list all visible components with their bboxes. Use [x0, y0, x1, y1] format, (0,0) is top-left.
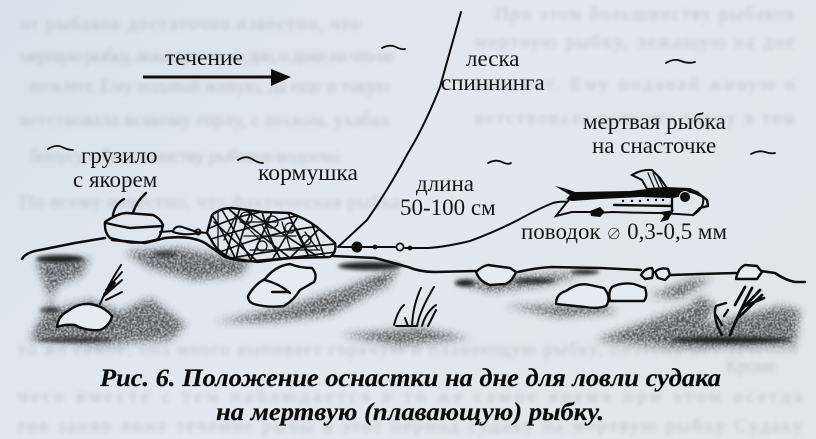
show-through text from the reverse page: бонусу и большинству рыбаков водоема: [30, 146, 341, 167]
rock: large pair: [556, 283, 646, 308]
label: feeder: кормушка: [258, 160, 358, 185]
swivel links: [160, 227, 207, 234]
water squiggles: [48, 46, 775, 164]
show-through text from the reverse page: гов заняв ложе течение рыбы в этот период судаку на мертвую рыбку Судаку: [18, 416, 804, 437]
plant: lower left: [100, 265, 122, 304]
show-through text from the reverse page: чего вместе с тем наблюдается в то же самое время при этом всегда: [18, 386, 804, 407]
current arrow: [143, 69, 291, 86]
sinker bead: [352, 242, 362, 252]
dead fish on the rig: [555, 170, 708, 222]
plant: right: [715, 287, 764, 335]
show-through text from the reverse page: то же самое, она много выпивает горячую и плавающую рыбку, поэтому нет течения: [18, 339, 798, 360]
label: weight with anchor: с якорем: [73, 167, 158, 192]
rock: on line centre right: [476, 265, 516, 285]
rocks: small pair on line: [641, 268, 670, 280]
show-through text from the reverse page: Кроме: [725, 356, 777, 377]
riverbed shading: [30, 248, 800, 348]
rock: central pair: [248, 264, 316, 307]
show-through text from the reverse page: мертвую рыбку, лежащую на дне: [475, 32, 795, 53]
swivel bead: [195, 229, 201, 235]
show-through text from the reverse page: возьмет. Ему подавай живую и: [475, 74, 795, 95]
label: dead fish: на снасточке: [592, 133, 716, 158]
plant: middle: [394, 287, 436, 326]
rock: right on line: [736, 265, 762, 279]
show-through text from the reverse page: от рыбаков достаточно известно, что: [20, 14, 360, 35]
leader swivel: [373, 243, 412, 251]
rock: lower left: [57, 304, 112, 330]
show-through text from the reverse page: ветствовала всякому горлу, с песком, ухабах: [20, 110, 390, 131]
caption: на мертвую (плавающую) рыбку.: [216, 399, 604, 426]
spinning line: [338, 12, 461, 247]
show-through text from the reverse page: возьмет. Ему подавай живую, да еще и такую: [30, 76, 390, 97]
riverbed line: [22, 237, 805, 282]
weight with anchor: [105, 193, 163, 243]
show-through text from the reverse page: По всему известно, что фактическая рыбка: [20, 192, 401, 213]
label: dead fish: мертвая рыбка: [583, 109, 726, 134]
label: weight with anchor: грузило: [81, 143, 158, 168]
show-through text from the reverse page: При этом большинству рыбаков: [495, 4, 795, 25]
label: spinning line: леска: [466, 46, 520, 71]
label: leader diameter: поводок ∅ 0,3-0,5 мм: [521, 219, 727, 244]
label: spinning line: спиннинга: [441, 70, 545, 95]
feeder net: [207, 208, 336, 262]
caption: Рис. 6. Положение оснастки на дне для ловли судака: [99, 365, 721, 392]
label: leader length: длина: [416, 171, 474, 196]
show-through text from the reverse page: ветствовала всякому горлу в том: [475, 108, 795, 129]
current label: течение: [165, 45, 243, 70]
label: leader length: 50-100 см: [400, 195, 496, 220]
caption: [99, 365, 721, 426]
leader line with swivel: [340, 202, 568, 248]
show-through text from the reverse page: мертвую рыбку, лежащую но на дне, и даже на что-не: [20, 46, 395, 67]
